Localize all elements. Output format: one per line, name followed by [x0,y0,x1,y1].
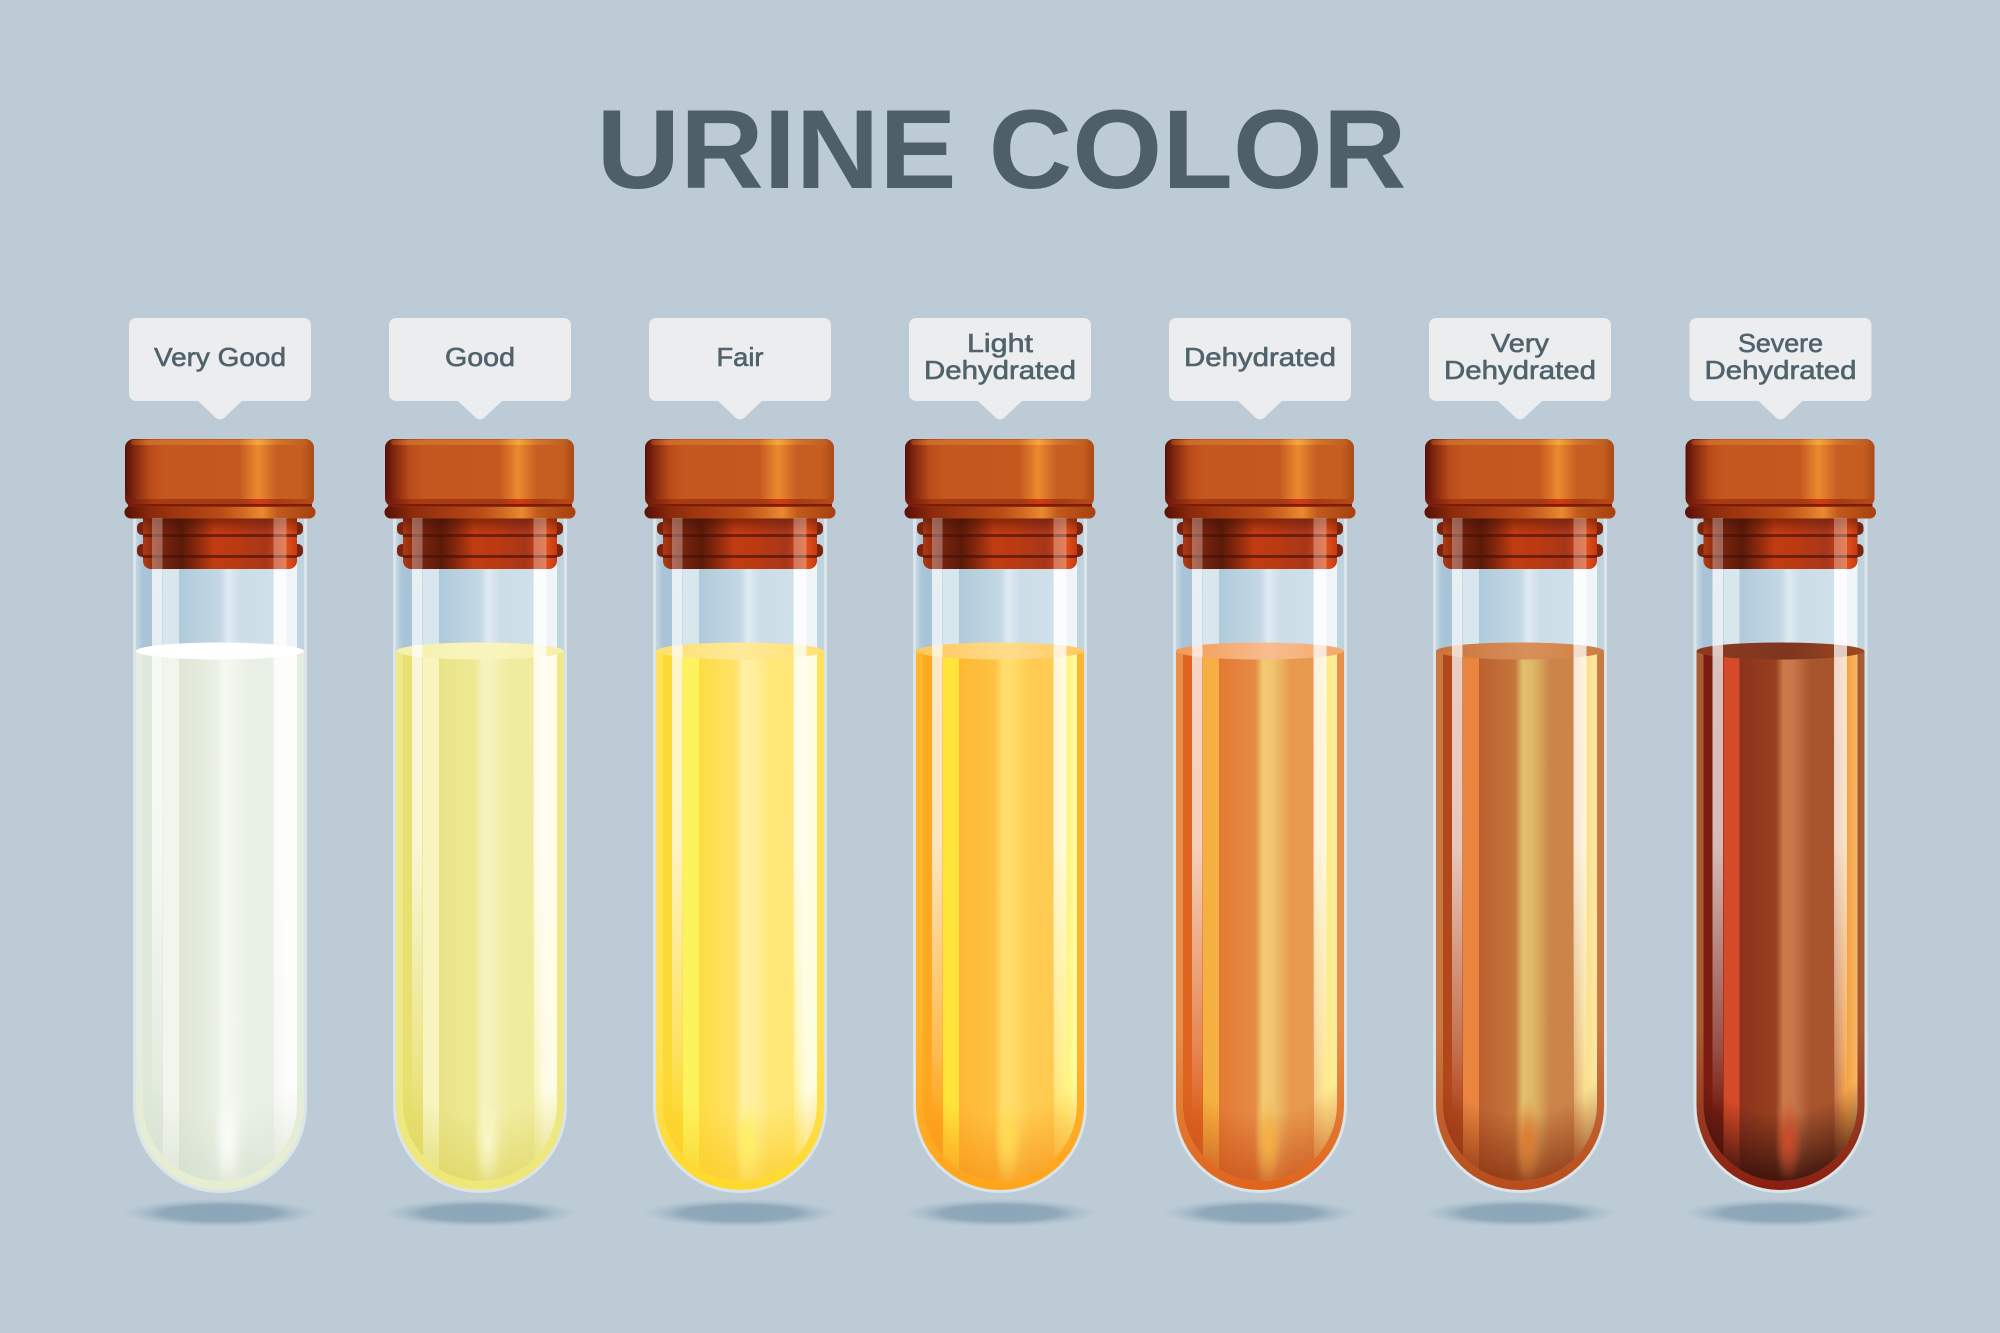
glass highlights [1192,518,1326,1115]
speech bubble: Very Dehydrated: Dehydrated [1444,355,1596,385]
tube shadow [903,1199,1097,1227]
glass tube [393,518,567,1193]
test tube: Very Dehydrated [1423,318,1617,1227]
speech bubble: Very Dehydrated: Very [1491,328,1549,358]
glass highlights [672,518,806,1115]
test tube: Very Good [123,318,317,1227]
speech bubble: Dehydrated [1169,318,1351,420]
liquid: Very Dehydrated [1436,642,1604,1190]
speech bubble: Light Dehydrated [909,318,1091,420]
glass highlights [412,518,546,1115]
speech bubble: Dehydrated: Dehydrated [1184,342,1336,372]
liquid: Light Dehydrated [916,642,1084,1190]
speech bubble: Good [389,318,571,420]
tube shadow [383,1199,577,1227]
test tube: Fair [643,318,837,1227]
speech bubble: Severe Dehydrated: Severe [1738,328,1823,358]
glass highlights [1452,518,1586,1115]
speech bubble: Severe Dehydrated: Dehydrated [1704,355,1856,385]
glass highlights [152,518,286,1115]
cap [1164,439,1356,569]
liquid: Fair [656,642,824,1190]
cap [124,439,316,569]
speech bubble: Light Dehydrated: Dehydrated [924,355,1076,385]
glass tube [1173,518,1347,1193]
test tube: Good [383,318,577,1227]
tube shadow [123,1199,317,1227]
tube shadow [1684,1199,1878,1227]
speech bubble: Very Good [129,318,311,420]
glass tube [653,518,827,1193]
liquid: Severe Dehydrated [1696,642,1864,1190]
liquid: Very Good [136,642,304,1190]
liquid: Dehydrated [1176,642,1344,1190]
glass tube [133,518,307,1193]
glass highlights [1712,518,1847,1115]
speech bubble: Severe Dehydrated [1690,318,1872,420]
test tube: Light Dehydrated [903,318,1097,1227]
tube shadow [1423,1199,1617,1227]
liquid: Good [396,642,564,1190]
speech bubble: Very Good: Very Good [154,342,286,372]
glass tube [1433,518,1607,1193]
glass tube [913,518,1087,1193]
speech bubble: Fair: Fair [717,342,764,372]
cap [1424,439,1616,569]
cap [1685,439,1876,569]
speech bubble: Very Dehydrated [1429,318,1611,420]
speech bubble: Light Dehydrated: Light [967,328,1034,358]
cap [904,439,1096,569]
glass highlights [932,518,1066,1115]
tube shadow [643,1199,837,1227]
speech bubble: Fair [649,318,831,420]
title: URINE COLOR [596,87,1406,212]
test tube: Severe Dehydrated [1684,318,1878,1227]
cap [644,439,836,569]
cap [384,439,576,569]
speech bubble: Good: Good [445,342,515,372]
glass tube [1694,518,1868,1193]
tube shadow [1163,1199,1357,1227]
test tube: Dehydrated [1163,318,1357,1227]
